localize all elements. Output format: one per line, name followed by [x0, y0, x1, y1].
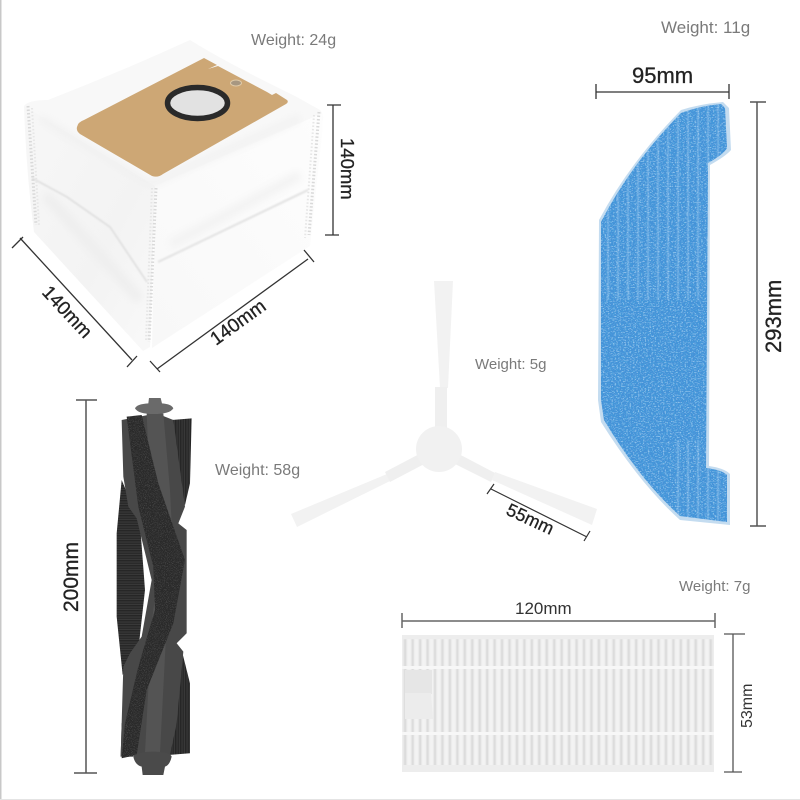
dimension: roller length [60, 400, 97, 773]
dust bag [24, 40, 323, 351]
dimension: roller length: 200mm [60, 542, 83, 612]
dimension: bag height: 140mm [337, 138, 358, 200]
dimension: brush arm [487, 484, 590, 541]
dimension: bag length [12, 237, 137, 367]
bristle strip [122, 415, 185, 758]
HEPA filter [402, 635, 714, 772]
brush arm: left [291, 474, 390, 527]
weight label: filter: Weight: 7g [679, 578, 750, 595]
dimension: brush arm: 55mm [503, 499, 557, 539]
dimension: filter height [724, 634, 756, 772]
weight label: bag: Weight: 24g [251, 32, 336, 49]
dimension: bag width: 140mm [207, 296, 270, 350]
dimension: bag width [150, 250, 314, 372]
dimension: filter width [402, 599, 715, 628]
dimension: bag length: 140mm [37, 282, 96, 343]
weight label: brush: Weight: 5g [475, 356, 546, 373]
filter ring [168, 88, 228, 118]
brush hub [416, 426, 462, 472]
main roller brush [117, 398, 192, 775]
filter tab [405, 693, 433, 719]
side brush [291, 281, 597, 527]
weight label: roller: Weight: 58g [215, 462, 300, 479]
dimension: filter height: 53mm [739, 684, 756, 728]
brush arm: right [453, 452, 495, 482]
dimension: mop height [750, 102, 786, 526]
dimension: mop height: 293mm [761, 280, 786, 353]
roller caps [135, 398, 173, 414]
bag top face [24, 40, 323, 188]
bag left face [24, 106, 155, 351]
mop pad [596, 100, 732, 525]
dimension: filter width: 120mm [515, 599, 572, 618]
roller blades [121, 413, 187, 757]
bristles back [172, 418, 192, 505]
dimension: mop width [596, 63, 729, 99]
cardboard plate [77, 58, 288, 177]
bag right face [152, 113, 323, 348]
weight label: mop: Weight: 11g [661, 18, 750, 37]
brush arm: top [434, 281, 453, 388]
dimension: mop width: 95mm [632, 63, 693, 88]
dimension: bag height [325, 105, 358, 235]
